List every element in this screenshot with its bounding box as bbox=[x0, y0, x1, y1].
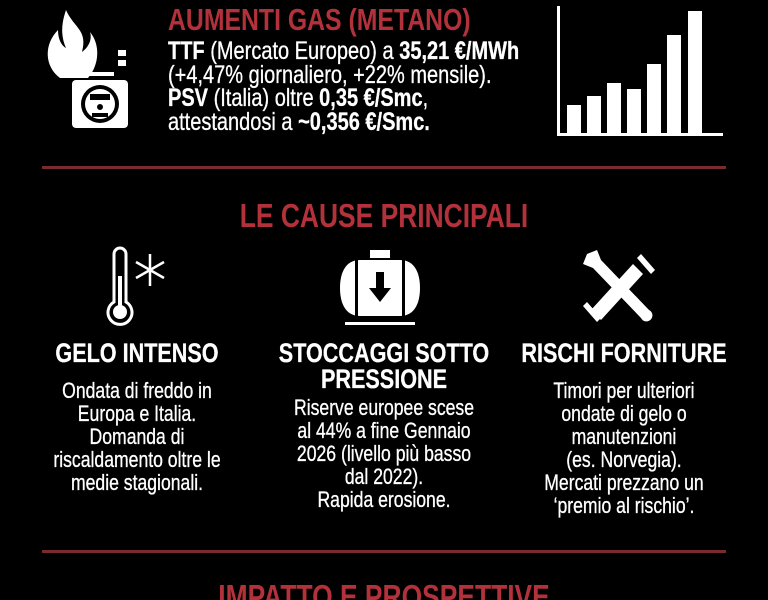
panel: rischi forniture: Timori per ulteriori bbox=[553, 378, 695, 403]
panel: stoccaggi: Riserve europee scese bbox=[294, 395, 474, 420]
panel: rischi forniture: Mercati prezzano un bbox=[544, 470, 704, 495]
panel: rischi forniture bbox=[521, 338, 727, 518]
panel: gelo intenso: medie stagionali. bbox=[71, 470, 203, 495]
title: aumenti gas: AUMENTI GAS (METANO) bbox=[168, 2, 471, 37]
panel: stoccaggi: 2026 (livello più basso bbox=[297, 441, 471, 466]
panel: gelo intenso: Ondata di freddo in bbox=[62, 378, 212, 403]
heading: cause principali: LE CAUSE PRINCIPALI bbox=[240, 197, 528, 234]
panel: gelo intenso: riscaldamento oltre le bbox=[53, 447, 221, 472]
panel: rischi forniture: (es. Norvegia). bbox=[566, 447, 682, 472]
panel: stoccaggi: PRESSIONE bbox=[321, 364, 447, 394]
text block: prices: PSV (Italia) oltre 0,35 €/Smc, bbox=[168, 84, 428, 112]
panel: rischi forniture: ondate di gelo o bbox=[561, 401, 687, 426]
text block: prices: (+4,47% giornaliero, +22% mensile). bbox=[168, 60, 492, 88]
icon: gas meter with flame bbox=[48, 10, 128, 128]
panel: rischi forniture: RISCHI FORNITURE bbox=[521, 338, 727, 368]
panel: stoccaggi: STOCCAGGI SOTTO bbox=[279, 338, 489, 368]
icon: thermometer snowflake bbox=[106, 246, 165, 326]
icon: wrench and pipe bbox=[583, 250, 655, 322]
panel: stoccaggi: Rapida erosione. bbox=[317, 487, 451, 512]
icon: storage tank bbox=[340, 250, 420, 325]
panel: stoccaggi bbox=[279, 338, 489, 512]
panel: stoccaggi: dal 2022). bbox=[345, 464, 423, 489]
panel: stoccaggi: al 44% a fine Gennaio bbox=[297, 418, 471, 443]
panel: gelo intenso: Europa e Italia. bbox=[78, 401, 196, 426]
text block: prices: attestandosi a ~0,356 €/Smc. bbox=[168, 108, 430, 136]
bar chart bbox=[557, 6, 723, 136]
panel: gelo intenso: GELO INTENSO bbox=[55, 338, 219, 368]
text block: prices: TTF (Mercato Europeo) a 35,21 €/MWh bbox=[168, 37, 519, 65]
panel: gelo intenso: Domanda di bbox=[90, 424, 184, 449]
panel: gelo intenso bbox=[53, 338, 221, 495]
text block: prices bbox=[168, 37, 519, 136]
panel: rischi forniture: manutenzioni bbox=[572, 424, 676, 449]
panel: rischi forniture: ‘premio al rischio’. bbox=[554, 493, 694, 518]
